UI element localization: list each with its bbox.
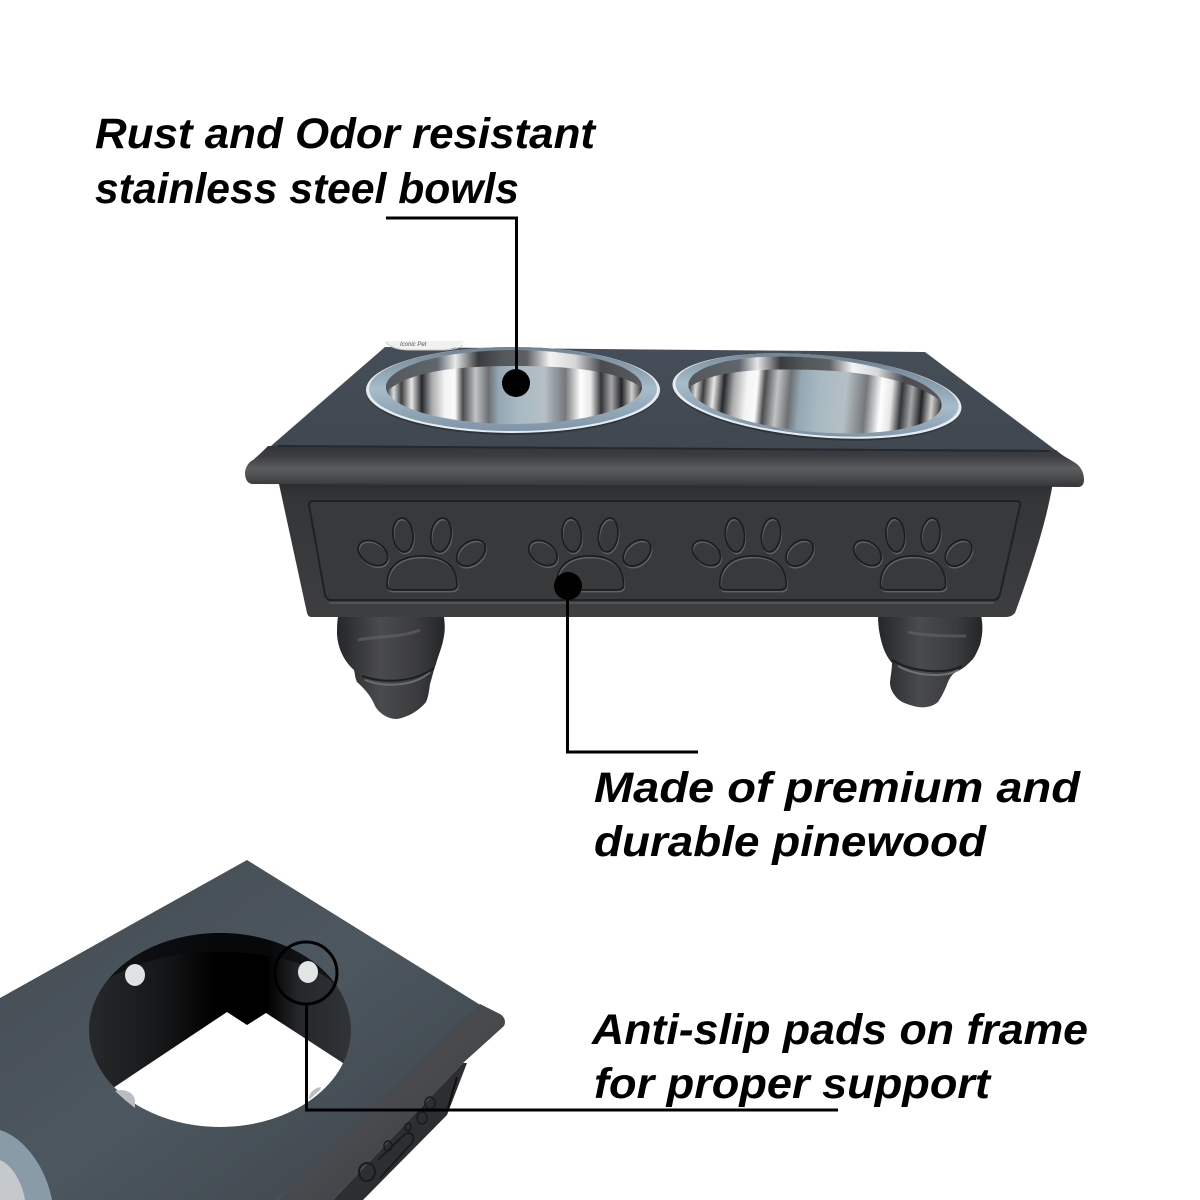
callout text: pinewood: durable pinewood	[594, 818, 987, 866]
label sticker	[384, 341, 464, 350]
callout text: pinewood: Made of premium and	[594, 764, 1081, 812]
callout text: anti-slip pads	[591, 1006, 1088, 1108]
paw print 4	[849, 517, 977, 592]
stand leg: left	[337, 617, 445, 719]
anti-slip pad: lower right	[309, 1087, 321, 1099]
bowl hole	[89, 933, 360, 1140]
stand leg: right	[878, 615, 982, 707]
paw prints	[354, 517, 977, 592]
callout text: anti-slip pads: for proper support	[594, 1060, 992, 1108]
callout leader: anti-slip pads	[275, 942, 838, 1110]
paw print 1	[354, 517, 491, 592]
label sticker: Iconic Pet	[400, 342, 427, 348]
paw print 2	[524, 517, 656, 592]
steel bowl: right	[672, 353, 962, 441]
stand body	[278, 478, 1053, 617]
stand top surface	[264, 347, 1058, 452]
panel lower highlight	[329, 602, 994, 604]
cropped steel bowl	[0, 1130, 52, 1200]
detail photo: underside frame with anti-slip pads	[0, 860, 505, 1200]
moulded top lip	[245, 446, 1084, 487]
callout leader: pinewood	[554, 572, 698, 752]
callout text: bowls: Rust and Odor resistant	[95, 110, 597, 158]
engraved front panel	[309, 501, 1020, 600]
callout text: anti-slip pads: Anti-slip pads on frame	[591, 1006, 1088, 1054]
anti-slip pad: upper right	[298, 961, 318, 983]
product: elevated double bowl stand	[245, 341, 1084, 719]
callout text: pinewood	[594, 764, 1081, 866]
frame side with paw engraving	[333, 1063, 467, 1200]
frame edge moulding	[277, 1004, 505, 1200]
steel bowl: left	[366, 347, 660, 435]
frame top with bowl hole	[0, 860, 482, 1200]
anti-slip pad: upper left	[125, 964, 145, 986]
callout leader: bowls	[386, 218, 530, 397]
callout text: bowls	[95, 110, 597, 213]
anti-slip pad: lower left	[115, 1090, 135, 1108]
paw print 3	[688, 517, 819, 592]
groove on top edge	[278, 446, 1050, 451]
callout text: bowls: stainless steel bowls	[95, 165, 519, 213]
